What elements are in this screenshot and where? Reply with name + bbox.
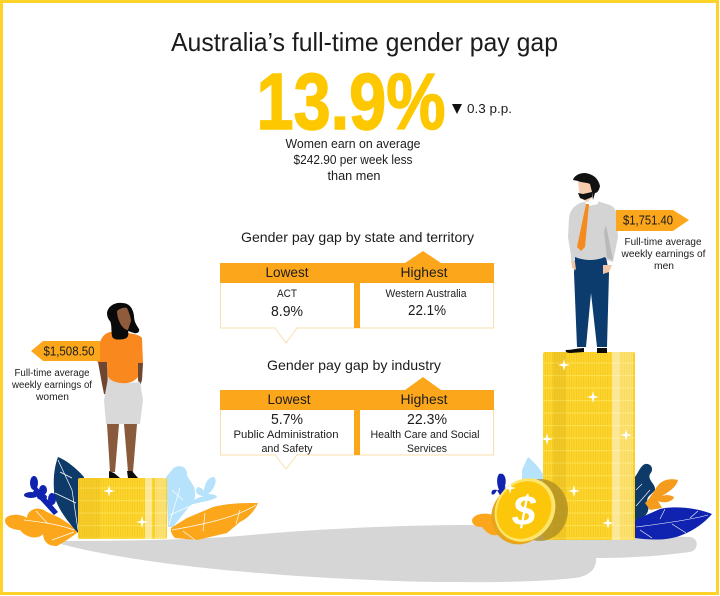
panel: state and territory: Western Australia [386, 288, 467, 300]
heading: industry: Gender pay gap by industry [267, 357, 441, 373]
label: men earnings: men [654, 261, 674, 272]
heading: state and territory: Gender pay gap by state and territory [241, 229, 474, 245]
summary text: than men [328, 169, 381, 183]
left foliage [5, 457, 258, 546]
label: women earnings: women [35, 392, 69, 403]
panel: industry: and Safety [262, 443, 313, 455]
label: women earnings [11, 341, 100, 403]
summary text: $242.90 per week less [294, 153, 412, 167]
figure: woman [97, 303, 143, 478]
panel: industry: Highest [400, 392, 448, 407]
panel: industry: 22.3% [407, 411, 447, 428]
icon: dollar coin: $ [511, 487, 536, 534]
label: men earnings: $1,751.40 [623, 214, 673, 228]
panel: industry: Lowest [268, 392, 311, 407]
icon: dollar coin [480, 466, 568, 556]
label: women earnings: $1,508.50 [44, 344, 95, 358]
panel: industry: Public Administration [234, 429, 338, 441]
panel: state and territory: Highest [400, 265, 448, 280]
label: men earnings [616, 210, 706, 272]
panel: industry: Health Care and Social [370, 429, 480, 441]
panel: state and territory [220, 251, 494, 343]
ground shadow [50, 525, 697, 582]
summary text [286, 137, 421, 183]
label: women earnings: weekly earnings of [11, 380, 92, 391]
panel: state and territory: 8.9% [271, 303, 303, 320]
figure: man [566, 173, 618, 353]
label: women earnings: Full-time average [14, 368, 90, 379]
change indicator: 0.3 p.p. [467, 101, 512, 116]
panel: industry: Services [407, 443, 447, 455]
panel: industry: 5.7% [271, 411, 303, 428]
label: men earnings: weekly earnings of [620, 249, 706, 260]
right foliage [472, 457, 712, 540]
summary text: Women earn on average [286, 137, 421, 151]
coin stack: men [541, 352, 635, 540]
coin stack: women [78, 478, 167, 539]
panel: state and territory: 22.1% [408, 302, 446, 319]
title: Australia’s full-time gender pay gap [171, 27, 558, 57]
panel: state and territory: ACT [277, 288, 297, 300]
panel: state and territory: Lowest [266, 265, 309, 280]
label: men earnings: Full-time average [624, 237, 702, 248]
headline figure: 13.9% [256, 57, 446, 146]
panel: industry [220, 377, 494, 469]
